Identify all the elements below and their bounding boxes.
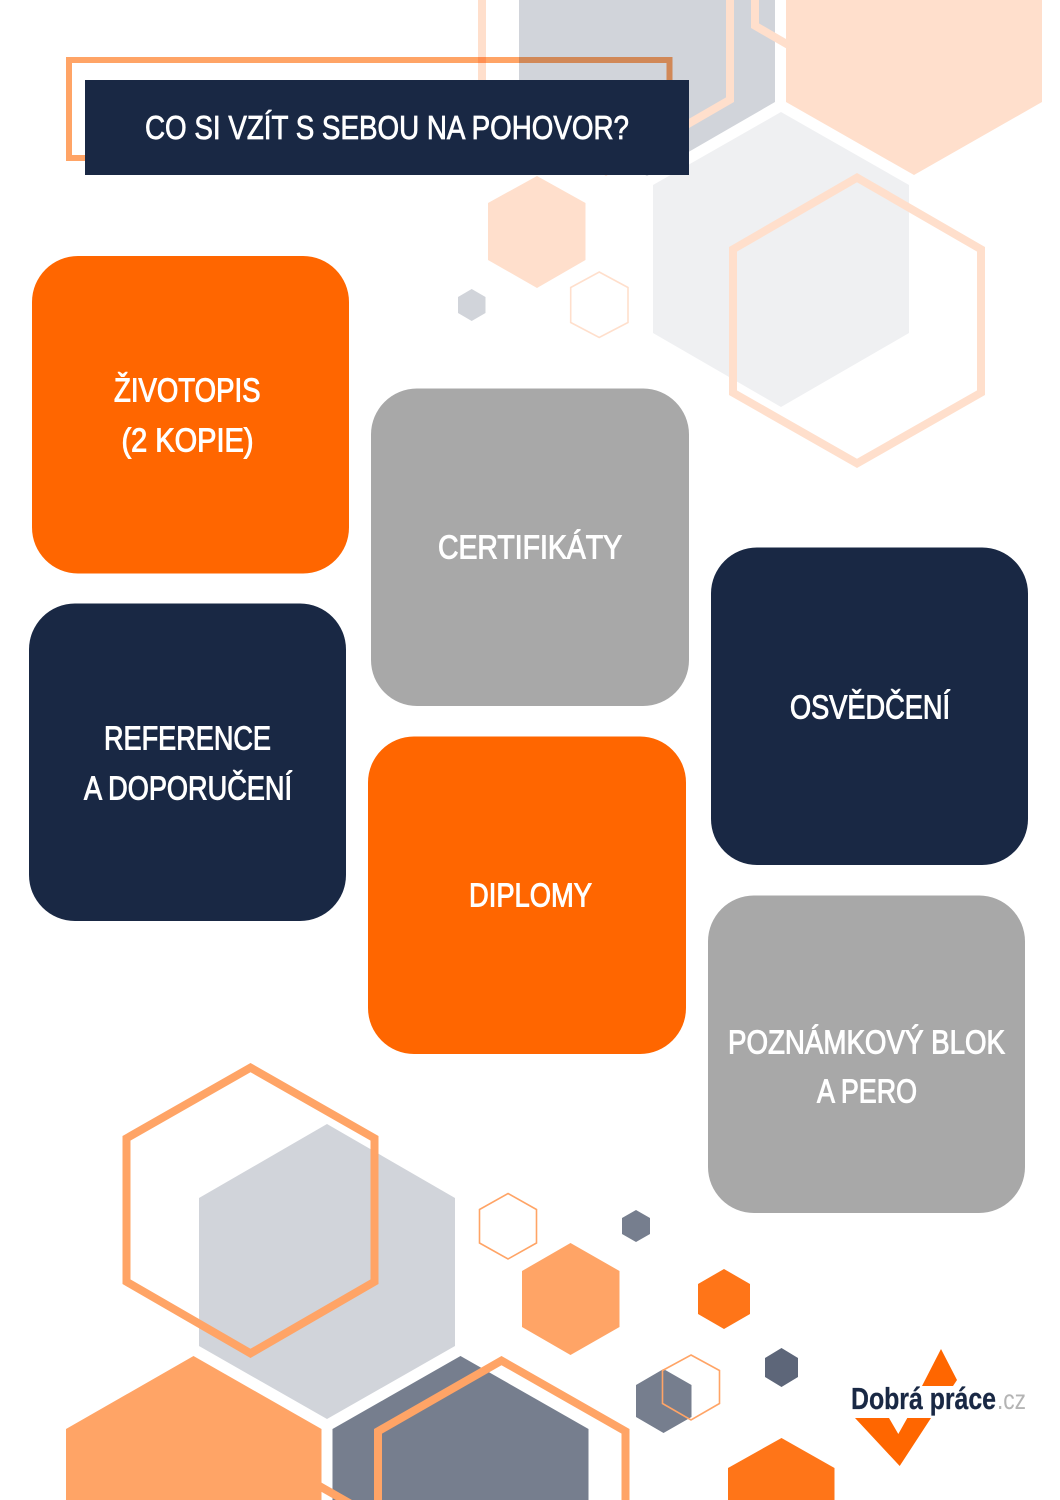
card: poznámkový blok a pero: [708, 896, 1025, 1213]
hexagon outline: small peach: [571, 272, 628, 338]
hexagon outline: small orange: [480, 1194, 536, 1259]
title: [85, 80, 689, 175]
card: osvědčení: OSVĚDČENÍ: [790, 688, 951, 726]
hexagon: orange bottom cut off: [728, 1438, 834, 1500]
hexagon: pale grey: [653, 112, 909, 407]
card: životopis: [32, 256, 349, 574]
top background hexagons: [458, 0, 1042, 463]
card: životopis: (2 KOPIE): [122, 422, 254, 458]
card: certifikáty: [371, 388, 689, 706]
card: životopis: ŽIVOTOPIS: [114, 372, 260, 408]
card: reference a doporučení: REFERENCE: [104, 720, 271, 756]
logo: wordmark: Dobrá práce: [851, 1381, 996, 1416]
hexagon: grey large: [199, 1124, 455, 1419]
card: diplomy: [368, 736, 686, 1054]
card: poznámkový blok a pero: POZNÁMKOVÝ BLOK: [728, 1024, 1005, 1060]
title frame: [69, 60, 670, 158]
hexagon: small bright orange: [698, 1269, 750, 1329]
card: reference a doporučení: [29, 604, 346, 921]
hexagon: orange solid bottom left: [66, 1356, 322, 1500]
hexagon: grey top: [519, 0, 775, 176]
logo: Dobrá práce.cz: [851, 1349, 1026, 1466]
logo: lower check mark: [855, 1418, 931, 1466]
hexagon outline: tiny orange: [662, 1355, 720, 1420]
hexagon: small peach solid: [488, 176, 586, 288]
card: reference a doporučení: A DOPORUČENÍ: [84, 770, 293, 806]
hexagon: dark grey bottom: [332, 1356, 588, 1500]
logo: upper triangle: [922, 1349, 957, 1386]
bottom background hexagons: [66, 1068, 834, 1500]
hexagon: tiny grey: [458, 289, 486, 321]
card: diplomy: DIPLOMY: [469, 876, 592, 914]
hexagon: slate: [636, 1369, 692, 1433]
hexagon: small dark slate: [765, 1348, 798, 1387]
hexagon outline: large orange: [126, 1068, 374, 1353]
hexagon outline: peach top right: [755, 0, 1003, 97]
hexagon outline: peach top left: [482, 0, 730, 171]
hexagon: mid orange solid: [522, 1243, 620, 1355]
card: certifikáty: CERTIFIKÁTY: [438, 528, 622, 566]
hexagon outline: hidden orange edge: [300, 1475, 372, 1500]
card: osvědčení: [711, 548, 1028, 865]
logo: domain: .cz: [997, 1384, 1026, 1415]
hexagon outline: large peach: [733, 178, 981, 463]
hexagon: tiny slate: [622, 1210, 650, 1242]
hexagon outline: orange bottom: [378, 1361, 626, 1500]
card: poznámkový blok a pero: A PERO: [817, 1072, 917, 1110]
title: CO SI VZÍT S SEBOU NA POHOVOR?: [145, 109, 629, 146]
hexagon: peach solid top right: [786, 0, 1042, 175]
